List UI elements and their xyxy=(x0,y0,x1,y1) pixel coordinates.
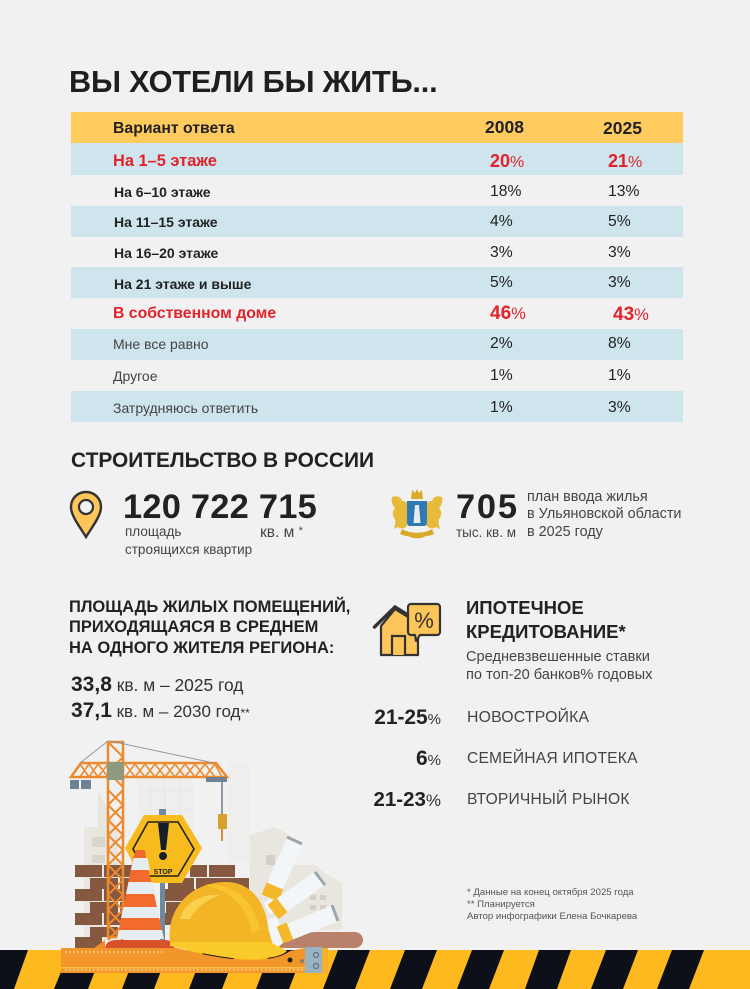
rate: new build: 21-25% xyxy=(374,706,441,729)
footnotes: * Данные на конец октября 2025 года xyxy=(467,887,634,898)
measuring tape xyxy=(61,947,328,973)
rate: family mortgage: СЕМЕЙНАЯ ИПОТЕКА xyxy=(467,750,638,767)
crane xyxy=(71,741,227,940)
title: ВЫ ХОТЕЛИ БЫ ЖИТЬ... xyxy=(69,64,437,98)
stat: housing plan for Ulyanovsk region: план ввода жилья xyxy=(527,489,648,505)
stat: apartments under construction: строящихся квартир xyxy=(125,542,252,557)
text: weighted average rates xyxy=(466,649,652,683)
rate: secondary market: 21-23% xyxy=(373,788,441,811)
stat: area in 2030: 37,1 кв. м – 2030 год** xyxy=(71,699,250,722)
rate: secondary market xyxy=(373,788,630,811)
row: don't care: 2% xyxy=(490,335,513,352)
rate: family mortgage xyxy=(416,747,638,770)
row: floor 21 and up: На 21 этаже и выше xyxy=(114,276,251,292)
footnotes: ** Планируется xyxy=(467,899,535,910)
stat: housing plan for Ulyanovsk region: тыс. кв. м xyxy=(456,525,516,540)
table header: 2008 xyxy=(485,116,524,136)
row: don't care: 8% xyxy=(608,335,631,352)
hazard stripe band xyxy=(0,950,750,989)
stat: apartments under construction: кв. м * xyxy=(260,524,303,541)
row: floors 11-15: 5% xyxy=(608,213,631,230)
stat: housing plan for Ulyanovsk region: в 2025 году xyxy=(527,524,603,540)
table: survey answers xyxy=(71,112,683,422)
row: floors 16-20: 3% xyxy=(490,244,513,261)
row: floor 21 and up: 3% xyxy=(608,274,631,291)
icon: map pin xyxy=(70,490,102,539)
rolled blueprints xyxy=(268,837,338,944)
row: own house xyxy=(113,303,649,325)
row: hard to say: 3% xyxy=(608,399,631,416)
row: floors 11-15 xyxy=(71,206,683,237)
heading: living area per resident: ПРИХОДЯЩАЯСЯ В СРЕДНЕМ xyxy=(69,618,318,636)
row: other: Другое xyxy=(113,368,157,384)
row: floors 1-5: 20% xyxy=(490,151,524,171)
stat: area in 2025: 33,8 кв. м – 2025 год xyxy=(71,673,243,696)
footnotes xyxy=(467,887,638,922)
stat: apartments under construction: 120 722 715 xyxy=(123,488,317,526)
rate: family mortgage: 6% xyxy=(416,747,441,770)
heading: living area per resident: НА ОДНОГО ЖИТЕЛЯ РЕГИОНА: xyxy=(69,638,334,656)
row: floors 16-20: 3% xyxy=(608,244,631,261)
heading: construction in Russia: СТРОИТЕЛЬСТВО В РОССИИ xyxy=(71,448,374,472)
row: floors 1-5: 21% xyxy=(608,151,642,171)
row: floors 6-10 xyxy=(114,183,639,200)
heading: living area per resident: ПЛОЩАДЬ ЖИЛЫХ ПОМЕЩЕНИЙ, xyxy=(69,598,350,616)
heading: mortgage lending: КРЕДИТОВАНИЕ* xyxy=(466,620,626,642)
row: floors 16-20 xyxy=(114,244,631,261)
row: other xyxy=(113,367,631,384)
row: floors 1-5: На 1–5 этаже xyxy=(113,152,217,170)
row: floors 6-10: На 6–10 этаже xyxy=(114,184,211,200)
row: floors 6-10: 18% xyxy=(490,183,521,200)
icon: Ulyanovsk region coat of arms xyxy=(392,489,442,538)
row: floor 21 and up xyxy=(71,267,683,298)
hard hat xyxy=(170,882,287,959)
traffic cone xyxy=(94,850,175,950)
stop sign xyxy=(125,809,202,940)
stat: housing plan for Ulyanovsk region xyxy=(456,488,681,540)
table header: Вариант ответа xyxy=(113,120,235,136)
stat: housing plan for Ulyanovsk region: в Ульяновской области xyxy=(527,506,681,522)
row: don't care xyxy=(71,329,683,360)
brick wall xyxy=(75,865,249,948)
brown roll xyxy=(278,932,363,948)
row: other: 1% xyxy=(608,367,631,384)
stat: apartments under construction xyxy=(123,488,317,557)
rate: secondary market: ВТОРИЧНЫЙ РЫНОК xyxy=(467,791,630,808)
row: floor 21 and up: 5% xyxy=(490,274,513,291)
row: floors 16-20: На 16–20 этаже xyxy=(114,245,218,261)
row: floors 11-15: 4% xyxy=(490,213,513,230)
stat: apartments under construction: площадь xyxy=(125,524,181,539)
table header xyxy=(71,112,683,143)
row: floors 11-15: На 11–15 этаже xyxy=(114,214,218,230)
row: floors 1-5 xyxy=(71,143,683,175)
heading: living area per resident xyxy=(69,596,350,656)
row: own house: 46% xyxy=(490,303,526,324)
row: hard to say: Затрудняюсь ответить xyxy=(113,400,258,416)
row: floors 6-10: 13% xyxy=(608,183,639,200)
row: hard to say xyxy=(71,391,683,422)
icon: house with percent: % xyxy=(414,608,434,633)
row: other: 1% xyxy=(490,367,513,384)
heading: mortgage lending: ИПОТЕЧНОЕ xyxy=(466,597,584,618)
icon: house with percent xyxy=(372,602,442,656)
stop sign: STOP xyxy=(154,869,173,876)
footnotes: Автор инфографики Елена Бочкарева xyxy=(467,910,637,922)
text: weighted average rates: Средневзвешенные ставки xyxy=(466,649,650,665)
stat: housing plan for Ulyanovsk region: 705 xyxy=(456,488,519,526)
row: own house: 43% xyxy=(613,304,649,325)
row: own house: В собственном доме xyxy=(113,305,276,322)
row: don't care: Мне все равно xyxy=(113,336,209,352)
rate: new build xyxy=(374,706,589,729)
background buildings xyxy=(84,762,342,940)
illustration: construction scene xyxy=(61,740,363,973)
heading: mortgage lending xyxy=(466,597,626,642)
text: weighted average rates: по топ-20 банков% годовых xyxy=(466,667,652,683)
row: hard to say: 1% xyxy=(490,399,513,416)
rate: new build: НОВОСТРОЙКА xyxy=(467,709,589,726)
table header: 2025 xyxy=(603,118,642,138)
